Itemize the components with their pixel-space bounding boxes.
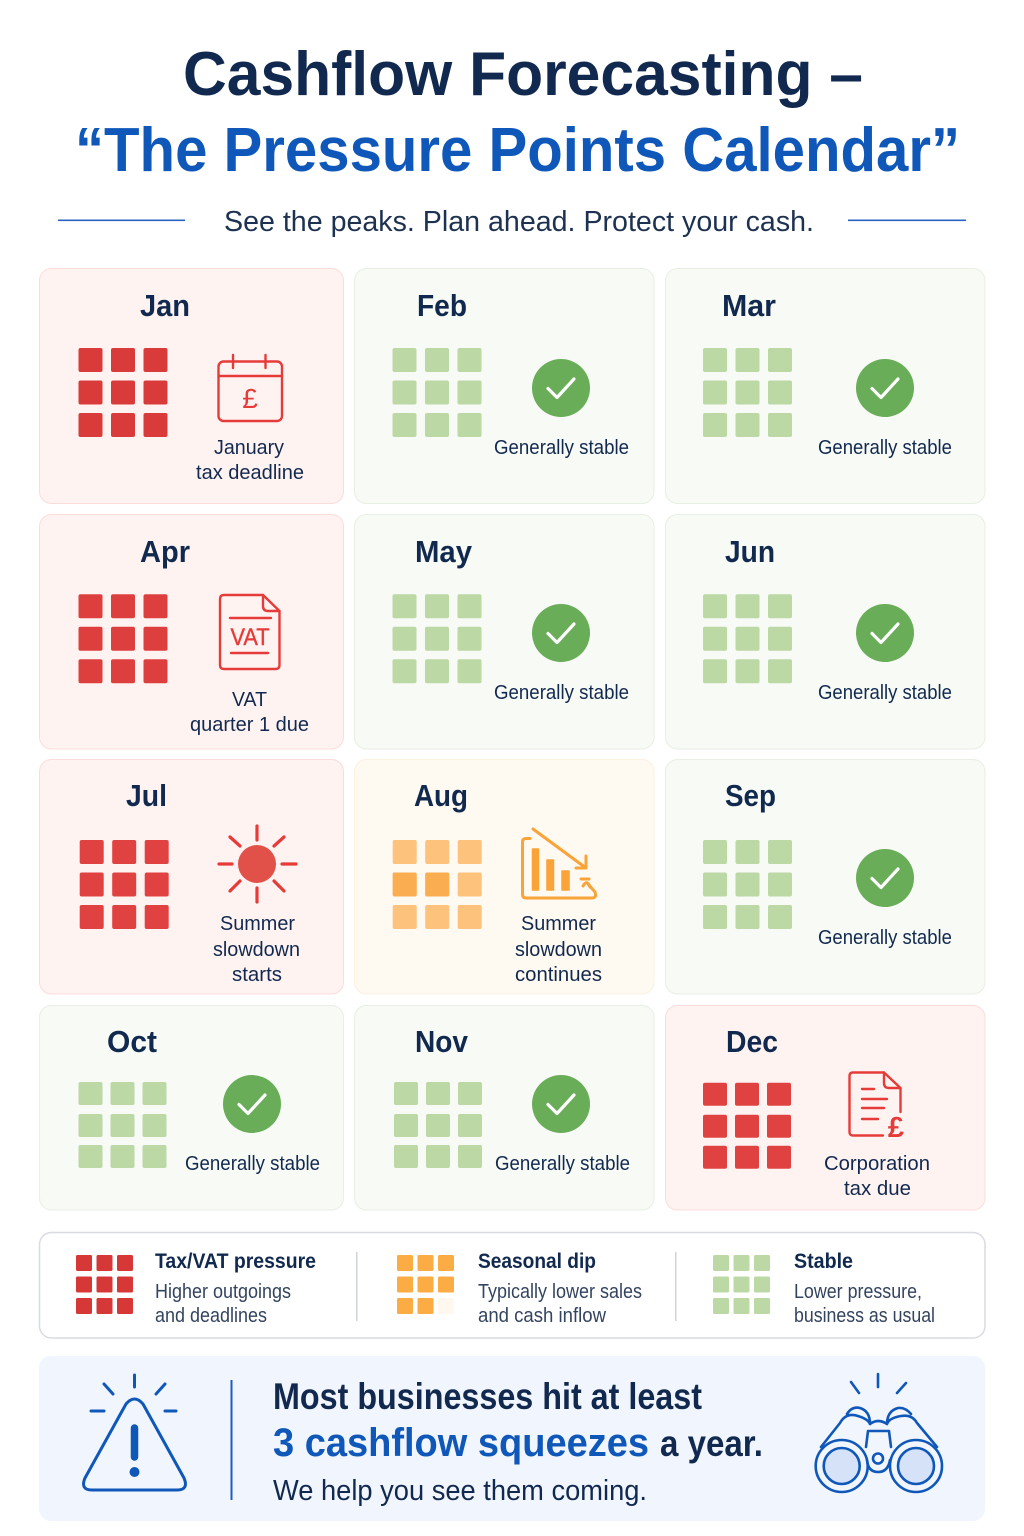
- panel: December: Corporation: [824, 1152, 930, 1175]
- panel: September: [666, 760, 985, 994]
- panel: July: Jul: [126, 778, 167, 813]
- panel: January: tax deadline: [196, 461, 304, 484]
- callout text: Most businesses hit at least: [273, 1376, 702, 1417]
- legend: tax and VAT pressure: and deadlines: [155, 1305, 267, 1327]
- legend: tax and VAT pressure: [76, 1250, 316, 1327]
- panel: November: Nov: [415, 1024, 469, 1059]
- legend: tax and VAT pressure: Higher outgoings: [155, 1281, 291, 1303]
- panel: March: Generally stable: [818, 436, 952, 459]
- icon: VAT document: [220, 595, 280, 669]
- panel: February: Generally stable: [494, 436, 629, 459]
- panel: August: [354, 760, 654, 994]
- icon: corporation tax document: [850, 1072, 904, 1144]
- legend: stable: Lower pressure,: [794, 1281, 922, 1303]
- icon: check: [856, 604, 914, 662]
- panel: May: [354, 514, 654, 749]
- icon: VAT document: VAT: [230, 624, 270, 651]
- icon: check: [532, 1075, 590, 1133]
- icon: binoculars: [816, 1374, 942, 1492]
- panel: February: Feb: [417, 288, 467, 323]
- callout text: We help you see them coming.: [273, 1475, 647, 1507]
- title: Cashflow Forecasting –: [183, 40, 863, 109]
- panel: February: [354, 268, 654, 504]
- panel: March: Mar: [722, 288, 776, 323]
- panel: August: continues: [515, 963, 602, 986]
- panel: October: Generally stable: [185, 1152, 320, 1175]
- panel: August: Aug: [414, 778, 468, 813]
- legend: seasonal dip: and cash inflow: [478, 1305, 607, 1327]
- subtitle: See the peaks. Plan ahead. Protect your cash.: [224, 206, 814, 238]
- panel: January: Jan: [140, 288, 190, 323]
- panel: April: [40, 514, 344, 749]
- panel: March: [666, 268, 985, 504]
- panel: April: Apr: [140, 534, 190, 569]
- legend: stable: [713, 1250, 935, 1327]
- panel: June: [666, 514, 985, 749]
- panel: October: Oct: [107, 1024, 157, 1059]
- panel: July: slowdown: [213, 938, 300, 961]
- panel: August: Summer: [521, 912, 596, 935]
- panel: December: [666, 1006, 985, 1210]
- icon: check: [532, 604, 590, 662]
- panel: December: Dec: [726, 1024, 778, 1059]
- panel: April: quarter 1 due: [190, 713, 309, 736]
- legend: seasonal dip: Seasonal dip: [478, 1250, 596, 1273]
- callout text: a year.: [660, 1423, 763, 1464]
- legend: tax and VAT pressure: Tax/VAT pressure: [155, 1250, 316, 1273]
- icon: check: [856, 359, 914, 417]
- callout text: [273, 1376, 763, 1507]
- panel: April: VAT: [232, 688, 267, 711]
- panel: December: tax due: [844, 1177, 911, 1200]
- icon: falling bar chart: [522, 829, 596, 898]
- panel: January: January: [214, 436, 285, 459]
- panel: October: [40, 1006, 344, 1210]
- title: “The Pressure Points Calendar”: [75, 116, 960, 185]
- icon: sun: [219, 826, 296, 902]
- panel: November: Generally stable: [495, 1152, 630, 1175]
- orange grid: [393, 840, 482, 929]
- icon: warning triangle: [84, 1375, 185, 1490]
- title: [75, 40, 960, 185]
- callout text: 3 cashflow squeezes: [273, 1421, 649, 1465]
- legend panel: [40, 1232, 985, 1338]
- panel: June: Jun: [725, 534, 775, 569]
- legend: stable: Stable: [794, 1250, 853, 1273]
- legend: seasonal dip: [397, 1250, 642, 1327]
- panel: May: May: [415, 534, 473, 569]
- callout banner: [39, 1356, 985, 1521]
- panel: May: Generally stable: [494, 681, 629, 704]
- panel: July: Summer: [220, 912, 295, 935]
- icon: check: [532, 359, 590, 417]
- legend: seasonal dip: Typically lower sales: [478, 1281, 642, 1303]
- panel: July: [40, 760, 344, 994]
- icon: check: [856, 849, 914, 907]
- panel: June: Generally stable: [818, 681, 952, 704]
- panel: August: slowdown: [515, 938, 602, 961]
- icon: calendar with pound sign: £: [242, 383, 258, 414]
- legend: stable: business as usual: [794, 1305, 935, 1327]
- icon: check: [223, 1075, 281, 1133]
- panel: September: Generally stable: [818, 926, 952, 949]
- panel: January: [40, 268, 344, 504]
- panel: September: Sep: [725, 778, 776, 813]
- icon: corporation tax document: £: [888, 1112, 904, 1144]
- icon: calendar with pound sign: [218, 355, 282, 421]
- panel: July: starts: [232, 963, 282, 986]
- panel: November: [354, 1006, 654, 1210]
